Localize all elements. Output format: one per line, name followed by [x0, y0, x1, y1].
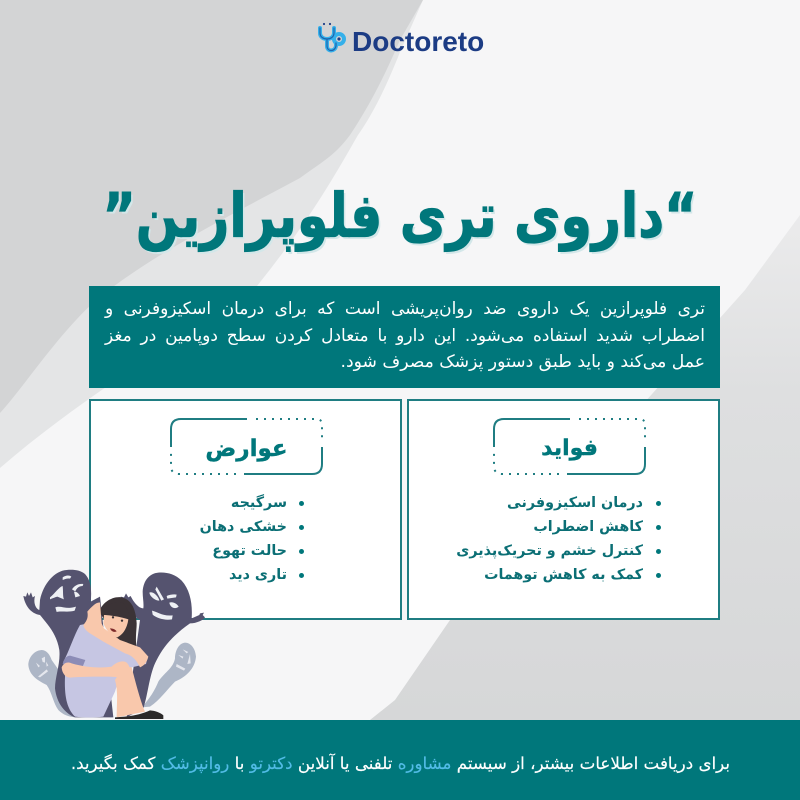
illustration: frightened girl with shadow figures: [23, 570, 205, 719]
list: side effects: حالت تهوع: [212, 543, 287, 559]
logo wordmark: Doctoreto: [352, 26, 484, 57]
girl mouth and eyes: [110, 616, 123, 632]
title: “داروی تری فلوپرازین”: [103, 180, 697, 251]
girl shin and foot: [115, 667, 145, 717]
pale ghost left: [28, 650, 80, 717]
pale ghost right: [142, 643, 196, 707]
list: benefits: [456, 495, 661, 583]
intro panel: [89, 286, 720, 388]
girl lower arm and hand: [62, 661, 130, 678]
icon: stethoscope: [318, 22, 346, 52]
girl fringe: [100, 602, 130, 620]
heading: benefits: [493, 418, 646, 475]
girl body: [63, 623, 147, 717]
list: benefits: درمان اسکیزوفرنی: [507, 495, 643, 511]
footer band: [0, 720, 800, 800]
girl shoe: [115, 710, 163, 719]
girl upper arm and hand: [83, 603, 148, 667]
girl hair back: [99, 597, 138, 655]
list: benefits: کنترل خشم و تحریک‌پذیری: [456, 543, 643, 559]
logo: [318, 22, 484, 57]
list: benefits: کمک به کاهش توهمات: [484, 567, 643, 583]
dark ghost left: [23, 570, 113, 717]
heading: benefits: فواید: [541, 436, 598, 461]
list: side effects: تاری دید: [229, 567, 287, 583]
dark ghost right: [121, 573, 205, 717]
girl sleeve: [63, 656, 85, 667]
intro text line 1: تری فلوپرازین یک داروی ضد روان‌پریشی است که برای درمان اسکیزوفرنی و: [105, 299, 705, 319]
girl face: [103, 615, 128, 637]
intro text line 3: عمل می‌کند و باید طبق دستور پزشک مصرف شود.: [341, 352, 705, 372]
heading: side effects: عوارض: [205, 436, 288, 462]
panel: side effects: [89, 399, 402, 620]
heading: side effects: [170, 418, 323, 475]
intro text line 2: اضطراب شدید استفاده می‌شود. این دارو با متعادل کردن سطح دوپامین در مغز: [105, 326, 705, 346]
list: benefits: کاهش اضطراب: [533, 519, 643, 535]
list: side effects: [200, 494, 304, 583]
list: side effects: سرگیجه: [231, 495, 287, 511]
ghost faces: [36, 575, 191, 677]
panel: benefits: [407, 399, 720, 620]
footer text: برای دریافت اطلاعات بیشتر، از سیستم مشاوره تلفنی یا آنلاین دکترتو با روانپزشک کمک بگیرید.: [71, 753, 730, 773]
list: side effects: خشکی دهان: [200, 519, 287, 535]
